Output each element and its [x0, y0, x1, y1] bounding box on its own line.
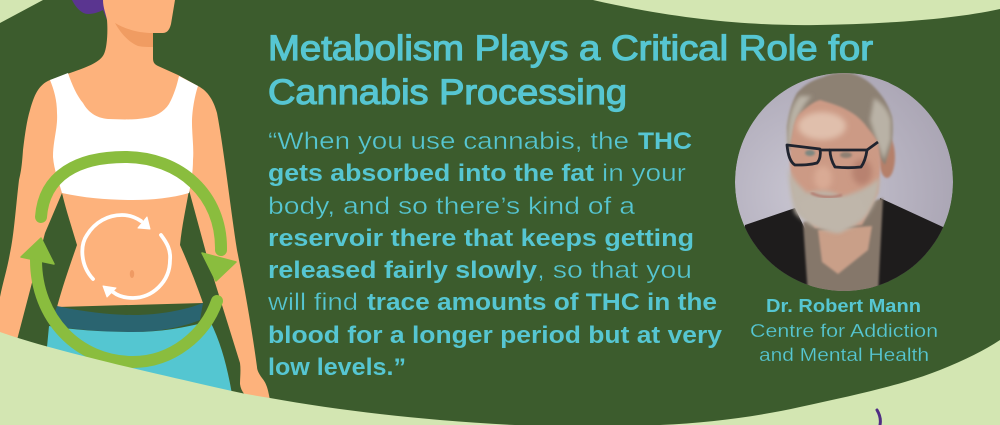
quote text block: “When you use cannabis, the [268, 128, 629, 155]
neck shadow [115, 23, 153, 47]
attribution: and Mental Health [759, 344, 929, 365]
quote text block: gets absorbed into the fat [268, 160, 594, 187]
icon: green cycle arrow, clockwise under the bottom [21, 238, 217, 362]
eyes [805, 150, 815, 156]
quote text block: THC [638, 128, 692, 155]
waistband [50, 303, 203, 332]
wave: top left corner [0, 0, 43, 23]
nose [814, 167, 832, 188]
attribution: Centre for Addiction [750, 320, 938, 341]
forehead highlight [798, 112, 846, 140]
quote text block: trace amounts of THC in the [367, 289, 717, 316]
navel [130, 270, 134, 278]
title: Metabolism Plays a Critical Role for [268, 29, 873, 68]
face [790, 100, 880, 228]
quote text block: , so that you [537, 257, 692, 284]
shirt [803, 198, 883, 295]
quote text block: in your [602, 160, 686, 187]
quote text block: low levels.” [268, 354, 406, 381]
icon: green cycle arrow, clockwise over the top [41, 157, 236, 281]
white crop top [50, 73, 198, 200]
glasses [787, 142, 878, 168]
quote text block: body, and so there’s kind of a [268, 193, 636, 220]
hair [787, 73, 893, 165]
title: Cannabis Processing [268, 73, 627, 112]
beard [788, 167, 880, 233]
quote text block: released fairly slowly [268, 257, 538, 284]
quote text block: reservoir there that keeps getting [268, 225, 694, 252]
wave: top right [593, 0, 1000, 25]
skirt [42, 321, 233, 400]
ear [879, 136, 895, 178]
quote text block [267, 128, 723, 381]
attribution [750, 296, 938, 365]
attribution: Dr. Robert Mann [766, 296, 921, 316]
frames [787, 142, 878, 168]
decorative purple stem [877, 410, 880, 425]
wave: bottom [0, 332, 1000, 425]
jacket [744, 198, 943, 287]
quote text block: blood for a longer period but at very [268, 322, 723, 349]
grey hair at temples [787, 96, 891, 160]
icon: small white cycle arrows [82, 215, 170, 298]
chin beard [798, 198, 866, 232]
hair [72, 0, 112, 20]
portrait: Dr. Robert Mann [735, 73, 953, 295]
portrait background [735, 73, 953, 291]
skin: head, neck, shoulders and arms [0, 0, 270, 400]
figure: woman's torso [0, 0, 270, 400]
title [268, 29, 873, 112]
quote text block: will find [267, 289, 358, 316]
cheek shadow [852, 159, 872, 185]
neck [818, 226, 872, 274]
mouth [811, 193, 842, 197]
